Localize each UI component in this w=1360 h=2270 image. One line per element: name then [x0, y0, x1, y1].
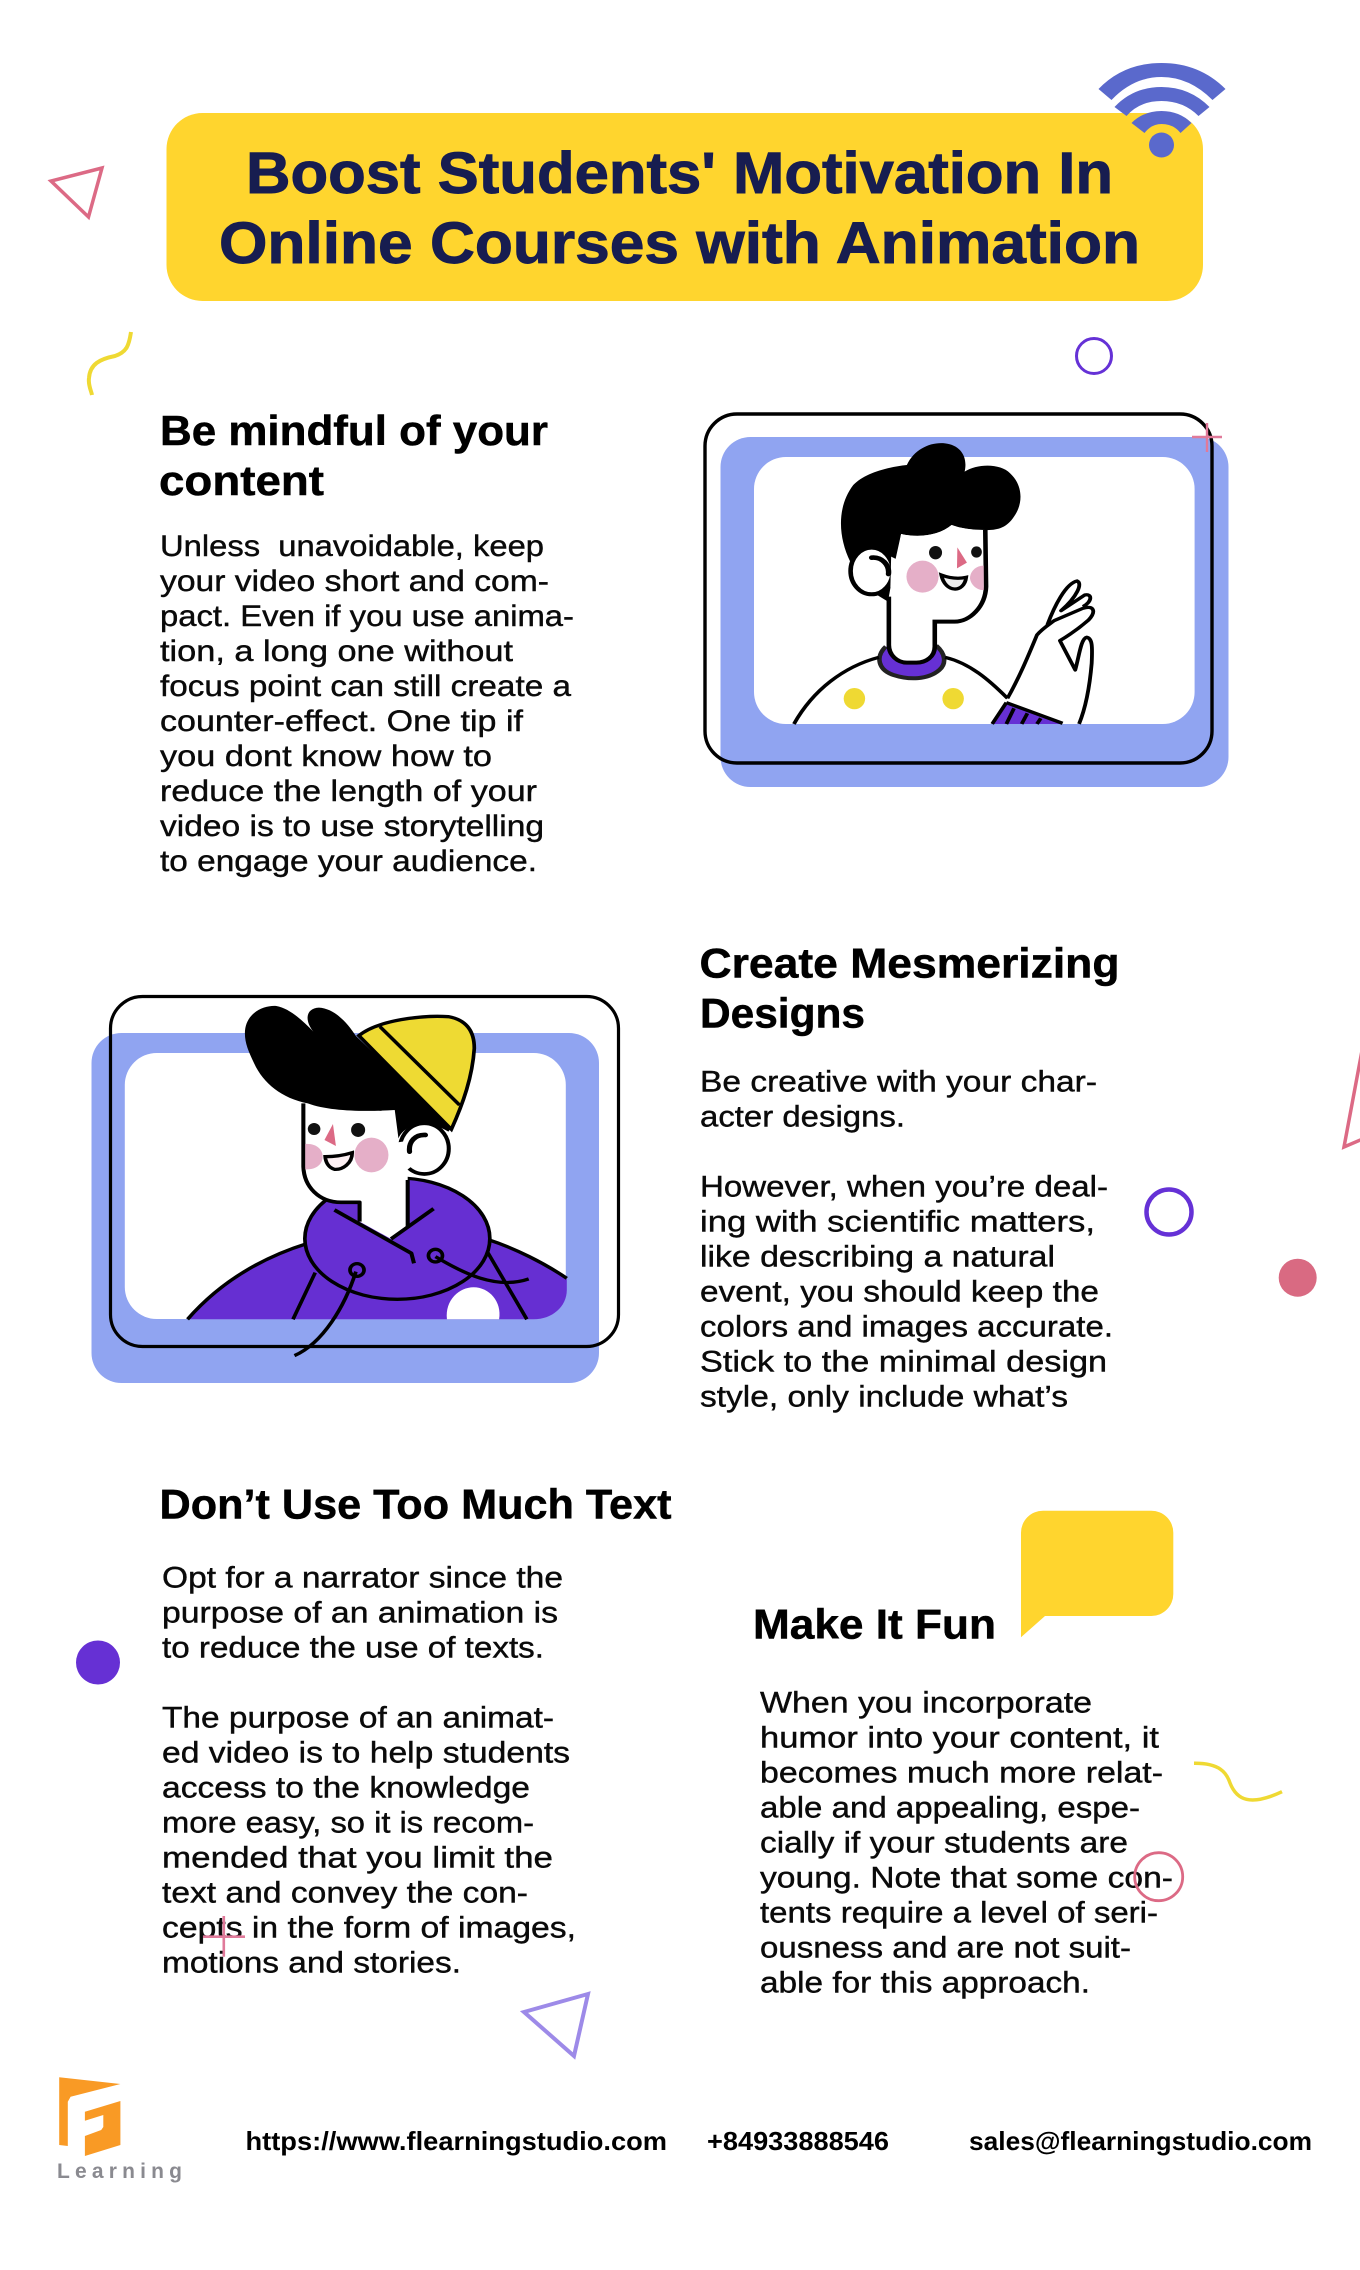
body text: ed video is to help students — [162, 1737, 570, 1770]
title banner — [166, 113, 1203, 301]
logo: F Learning — [57, 2077, 182, 2183]
heading: content — [159, 457, 324, 504]
body text: Stick to the minimal design — [700, 1346, 1107, 1379]
decoration: purple ring top — [1076, 338, 1112, 374]
body text: purpose of an animation is — [162, 1597, 558, 1630]
body text: mended that you limit the — [162, 1842, 553, 1875]
heading: Make It Fun — [753, 1601, 996, 1648]
text block: be mindful of your content — [159, 407, 574, 878]
body text: able and appealing, espe- — [760, 1792, 1140, 1825]
body text: pact. Even if you use anima- — [160, 600, 574, 633]
body text: The purpose of an animat- — [162, 1702, 554, 1735]
body text: event, you should keep the — [700, 1276, 1099, 1309]
body text: text and convey the con- — [162, 1877, 528, 1910]
body text: you dont know how to — [160, 740, 492, 773]
body text: video is to use storytelling — [160, 810, 544, 843]
character with yellow hat — [188, 1006, 567, 1356]
body text: cially if your students are — [760, 1827, 1128, 1860]
heading — [700, 940, 1120, 1037]
body text: counter-effect. One tip if — [160, 705, 524, 738]
decoration: pink plus over text — [203, 1916, 245, 1957]
heading: Create Mesmerizing — [700, 940, 1120, 987]
blue backing panel — [720, 437, 1228, 787]
body text: more easy, so it is recom- — [162, 1807, 534, 1840]
blue backing panel — [92, 1033, 599, 1383]
body text: to engage your audience. — [160, 845, 537, 878]
body text: cepts in the form of images, — [162, 1912, 576, 1945]
body text: acter designs. — [700, 1101, 905, 1134]
body text — [700, 1066, 1113, 1414]
body text: like describing a natural — [700, 1241, 1055, 1274]
waving character — [794, 443, 1093, 724]
body text — [760, 1687, 1173, 2000]
black outline frame — [705, 414, 1212, 763]
decoration: pink triangle top left — [51, 168, 102, 217]
body text: motions and stories. — [162, 1947, 461, 1980]
body text — [160, 530, 574, 878]
body text: able for this approach. — [760, 1967, 1090, 2000]
black outline frame — [110, 996, 618, 1346]
illustration: waving character in frame — [705, 414, 1228, 787]
body text: humor into your content, it — [760, 1722, 1159, 1755]
body text: your video short and com- — [160, 565, 549, 598]
body text: Opt for a narrator since the — [162, 1562, 563, 1595]
email address: sales@flearningstudio.com — [969, 2126, 1312, 2156]
body text: focus point can still create a — [160, 670, 572, 703]
white screen — [754, 457, 1195, 724]
body text: access to the knowledge — [162, 1772, 530, 1805]
body text: When you incorporate — [760, 1687, 1092, 1720]
logo mark — [59, 2077, 120, 2156]
decoration: yellow squiggle top left — [89, 332, 131, 395]
body text: Unless unavoidable, keep — [160, 530, 544, 563]
body text: tion, a long one without — [160, 635, 513, 668]
white screen — [125, 1053, 566, 1319]
decoration: pink plus — [1192, 423, 1222, 452]
body text — [162, 1562, 576, 1980]
decoration: purple triangle bottom — [524, 1994, 588, 2056]
title banner: Boost Students' Motivation In — [246, 141, 1113, 206]
decoration: pink triangle right edge — [1344, 1040, 1360, 1147]
decoration: purple ring right — [1146, 1190, 1192, 1234]
decoration: red dot — [1279, 1259, 1317, 1297]
body text: ing with scientific matters, — [700, 1206, 1095, 1239]
body text: young. Note that some con- — [760, 1862, 1173, 1895]
logo wordmark: Learning — [57, 2160, 182, 2183]
text block: make it fun — [753, 1601, 1173, 2000]
icon: wifi signal — [1098, 63, 1226, 158]
body text: However, when you’re deal- — [700, 1171, 1108, 1204]
body text: colors and images accurate. — [700, 1311, 1113, 1344]
website url: https://www.flearningstudio.com — [246, 2126, 667, 2156]
heading — [159, 407, 548, 504]
decoration: pink ring over text — [1135, 1853, 1183, 1901]
text block: don't use too much text — [160, 1481, 672, 1980]
footer contact details — [246, 2126, 1312, 2156]
body text: ousness and are not suit- — [760, 1932, 1131, 1965]
text block: create mesmerizing designs — [700, 940, 1120, 1414]
heading: Be mindful of your — [160, 407, 548, 454]
body text: tents require a level of seri- — [760, 1897, 1158, 1930]
body text: Be creative with your char- — [700, 1066, 1097, 1099]
phone number: +84933888546 — [707, 2126, 889, 2156]
body text: to reduce the use of texts. — [162, 1632, 544, 1665]
heading: Don’t Use Too Much Text — [160, 1481, 672, 1528]
illustration: character with hat in frame — [92, 996, 618, 1383]
decoration: purple dot left — [76, 1640, 120, 1684]
icon: yellow speech bubble — [1021, 1511, 1173, 1637]
body text: reduce the length of your — [160, 775, 537, 808]
title banner: Online Courses with Animation — [219, 211, 1140, 276]
body text: becomes much more relat- — [760, 1757, 1163, 1790]
decoration: yellow squiggle right — [1194, 1763, 1282, 1800]
heading: Designs — [700, 990, 865, 1037]
body text: style, only include what’s — [700, 1381, 1068, 1414]
